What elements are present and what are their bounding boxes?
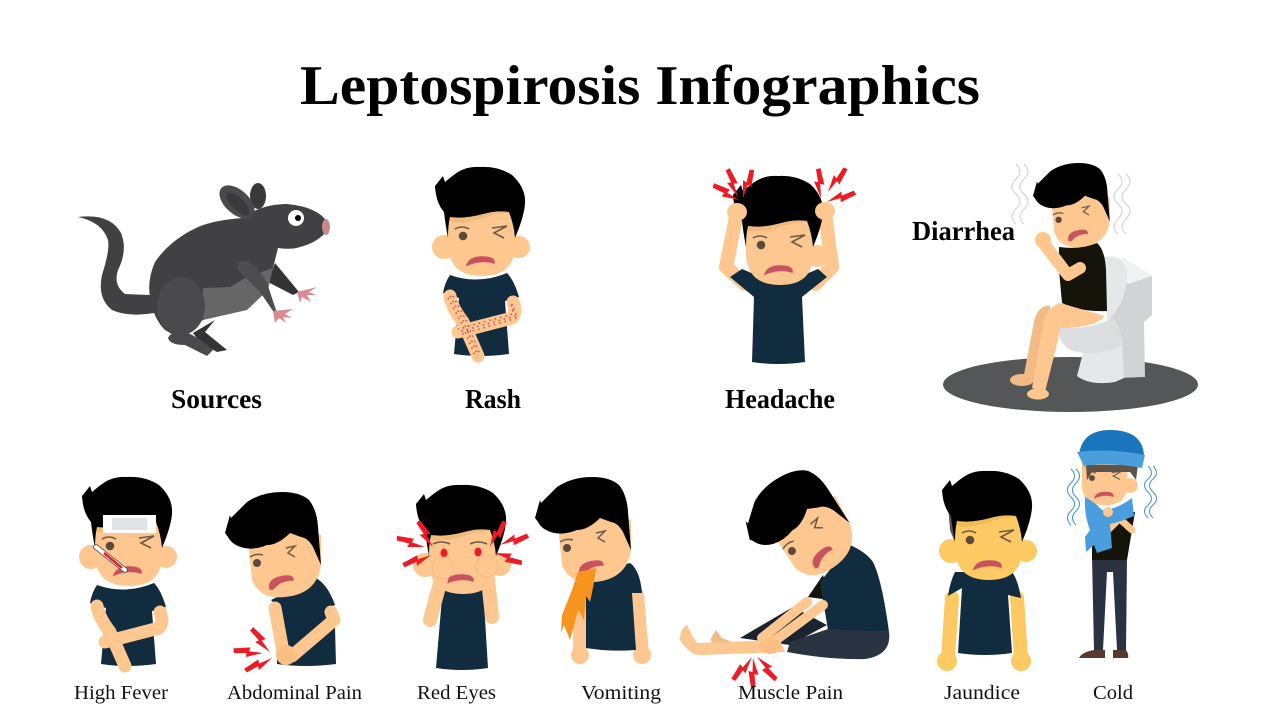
hair: [416, 485, 506, 556]
mouth: [446, 575, 473, 583]
label: Abdominal Pain: Abdominal Pain: [227, 682, 362, 704]
rat pupil: [295, 215, 301, 221]
temple: [425, 518, 435, 570]
figure: high fever: [79, 477, 177, 666]
rat far ear: [250, 183, 266, 209]
label: Headache: Headache: [725, 384, 835, 414]
label: Diarrhea: Diarrhea: [912, 216, 1015, 246]
arms: [726, 213, 832, 284]
shirt: [1092, 512, 1135, 560]
front foot: [1027, 388, 1049, 400]
face: [1082, 454, 1138, 505]
hands: [571, 646, 651, 664]
arms: [580, 590, 642, 655]
shiver lines: [1068, 466, 1156, 525]
title: Leptospirosis Infographics: [300, 55, 980, 117]
rat far foreleg: [268, 263, 299, 295]
hair band: [1086, 465, 1138, 480]
label: Cold: Cold: [1093, 682, 1133, 704]
toilet lid: [1103, 257, 1127, 322]
shirt: [443, 273, 519, 356]
label: Muscle Pain: Muscle Pain: [738, 682, 843, 704]
hands: [937, 651, 1031, 671]
red eye right: [474, 548, 482, 556]
head: [1033, 163, 1110, 247]
near leg and foot: [680, 625, 785, 655]
figure: headache: [710, 165, 857, 364]
undershirt: [808, 575, 830, 600]
red eye left: [440, 548, 448, 558]
rat far paw: [297, 287, 317, 303]
rat near paw: [273, 309, 293, 323]
head: [432, 167, 530, 276]
rat eye: [288, 210, 304, 226]
label: Sources: Sources: [171, 384, 262, 414]
figure: abdominal pain: [225, 492, 336, 676]
rat tail: [78, 216, 160, 315]
hands: [727, 202, 835, 221]
rat hind foot far: [193, 320, 227, 352]
rat body: [149, 204, 327, 337]
head: [535, 477, 631, 582]
figure: rash: [432, 167, 530, 358]
figure: red eyes: [395, 485, 530, 670]
arm: [1044, 244, 1080, 275]
rat near ear: [213, 179, 261, 225]
temple: [90, 512, 102, 560]
label: Vomiting: Vomiting: [581, 682, 661, 704]
arms: [948, 598, 1021, 658]
figure: muscle pain: [680, 458, 889, 688]
head: [733, 176, 828, 285]
head: [730, 458, 865, 596]
rat near foreleg: [237, 261, 277, 313]
hand: [1035, 232, 1051, 248]
face: [413, 518, 511, 594]
rat belly: [203, 268, 273, 320]
brows: [433, 542, 487, 544]
toilet tank: [1105, 258, 1152, 378]
figure: vomiting: [535, 477, 651, 664]
compress inner: [112, 518, 147, 530]
label: Jaundice: Jaundice: [944, 682, 1020, 704]
fist left: [432, 557, 454, 579]
vomit: [561, 568, 596, 640]
shirt: [436, 586, 488, 670]
rash dots: [448, 296, 517, 358]
trousers: [1092, 558, 1127, 650]
hat crown: [1079, 430, 1144, 455]
pain bolts: [395, 518, 530, 570]
hat band: [1077, 451, 1145, 468]
hand: [1103, 507, 1113, 517]
front leg: [1032, 303, 1105, 392]
shirt: [271, 578, 336, 666]
label: Red Eyes: Red Eyes: [417, 682, 496, 704]
back foot: [1010, 374, 1034, 386]
shirt: [730, 269, 827, 364]
shirt: [586, 563, 642, 651]
shirt: [820, 545, 889, 632]
temple: [948, 505, 960, 555]
fist right: [476, 555, 498, 577]
arms: [275, 608, 334, 657]
shirt: [948, 572, 1021, 655]
rat inner ear: [223, 189, 253, 219]
head: [225, 492, 321, 597]
forehead compress: [103, 515, 156, 533]
thermometer: [96, 547, 125, 570]
head: [939, 471, 1037, 580]
toilet pedestal: [1077, 340, 1124, 383]
arms: [762, 602, 823, 642]
scarf: [1085, 497, 1134, 553]
panel: sources rat illustration: [78, 179, 330, 356]
label: Rash: Rash: [465, 384, 521, 414]
rat nose: [322, 219, 330, 235]
arms: [450, 296, 515, 356]
far foot: [710, 630, 740, 650]
trousers: [787, 629, 889, 659]
arms: [430, 570, 492, 620]
floor shadow: [943, 357, 1198, 412]
toilet tank top: [1105, 256, 1152, 284]
figure: cold: [1068, 430, 1156, 658]
pain bolts: [729, 653, 780, 688]
rat hind foot near: [168, 332, 213, 356]
shoes: [1079, 650, 1128, 658]
hand: [759, 638, 781, 654]
figure: jaundice: [937, 471, 1037, 671]
odour lines: [1012, 164, 1130, 234]
label: High Fever: High Fever: [74, 682, 168, 704]
back leg: [740, 607, 827, 645]
hand: [276, 645, 296, 665]
crossed arms: [1092, 512, 1132, 540]
toilet bowl: [1058, 318, 1123, 353]
pain bolts: [710, 165, 857, 206]
shirt: [1059, 243, 1107, 311]
back leg: [1030, 312, 1050, 378]
pain bolts: [233, 626, 274, 676]
figure: diarrhea on toilet: [943, 163, 1198, 412]
rat haunch: [157, 277, 205, 335]
